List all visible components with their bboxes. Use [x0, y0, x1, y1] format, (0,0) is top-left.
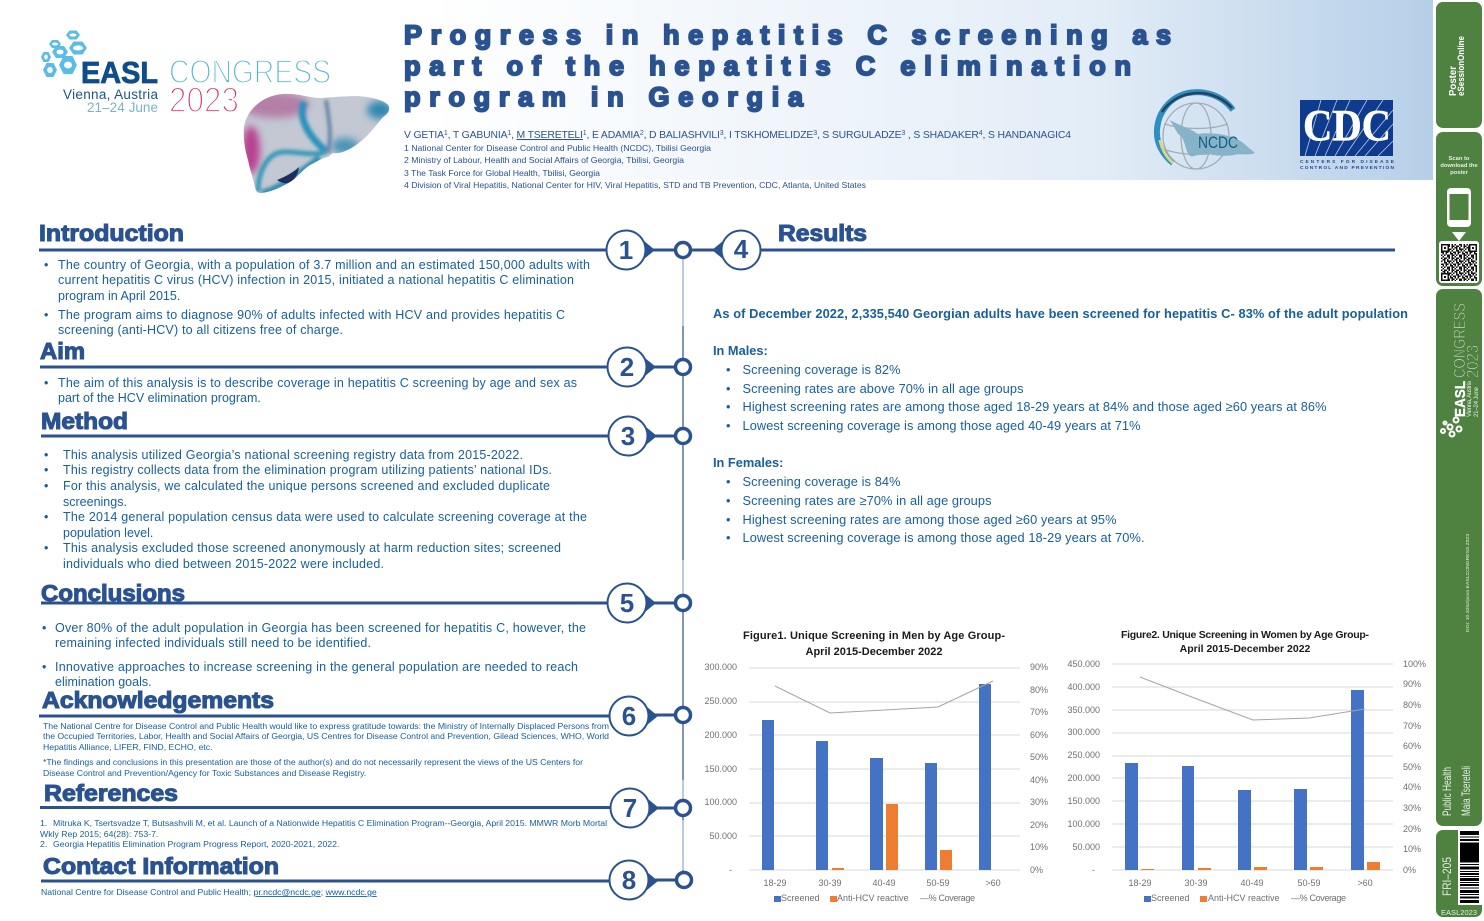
text block: •: [44, 510, 48, 524]
left axis: 350.000: [1067, 705, 1100, 715]
heading: Contact Information: [43, 853, 279, 879]
text: scan to download: [1440, 156, 1478, 176]
text block: •: [44, 448, 48, 462]
left axis: 100.000: [1067, 819, 1100, 829]
text block: The aim of this analysis is to describe coverage in hepatitis C screening by age and sex as: [58, 376, 577, 390]
text block: [44, 376, 577, 405]
right axis: 10%: [1403, 844, 1421, 854]
bars: screened: [762, 684, 991, 870]
text block: •: [44, 258, 48, 272]
authors: , S SHADAKER: [905, 130, 979, 141]
left axis: -: [729, 865, 732, 875]
marker 7: 7: [623, 793, 637, 823]
logo: EASL Congress 2023: [41, 30, 331, 120]
chart: figure 2 women: [1067, 629, 1426, 903]
left axis: 200.000: [1067, 773, 1100, 783]
right axis: 0%: [1030, 865, 1043, 875]
marker 7: [610, 788, 690, 828]
text block: •: [44, 376, 48, 390]
authors: 2: [640, 130, 644, 137]
affiliations: 1 National Center for Disease Control and Public Health (NCDC), Tbilisi Georgia: [404, 143, 711, 153]
text: scan to download: Scan to: [1449, 156, 1470, 162]
authors: 3: [901, 130, 905, 137]
category labels: [763, 878, 1001, 888]
text: FRI-205: FRI–205: [1440, 857, 1454, 896]
text: dates: 21–24 June: [87, 100, 158, 115]
legend: Anti-HCV reactive: [1208, 893, 1280, 903]
chart title: [743, 630, 1005, 658]
panel: conclusions: [41, 580, 690, 689]
category labels: 40-49: [872, 878, 896, 888]
right axis: [1403, 659, 1426, 875]
text: Vienna dates: 21–24 June: [1474, 386, 1480, 417]
left axis: 250.000: [704, 696, 737, 706]
text block: Innovative approaches to increase screening in the general population are needed to reach: [55, 660, 578, 674]
text block: This analysis utilized Georgia’s national screening registry data from 2015-2022.: [63, 448, 523, 462]
marker 6: [610, 696, 690, 736]
text block: Hepatitis Alliance, LIFER, FIND, ECHO, etc.: [43, 742, 212, 752]
left axis: 50.000: [709, 831, 737, 841]
text block: program in April 2015.: [58, 289, 180, 303]
females findings: In Females:: [713, 455, 783, 470]
marker 2: 2: [620, 352, 634, 382]
right axis: 20%: [1030, 820, 1048, 830]
left axis: 150.000: [704, 764, 737, 774]
heading: Introduction: [39, 220, 184, 246]
sidebar: QR download tab: [1436, 132, 1482, 286]
text block: For this analysis, we calculated the unique persons screened and excluded duplicate: [63, 479, 550, 493]
affiliations: [404, 143, 867, 190]
authors: M TSERETELI: [517, 130, 583, 141]
header banner: [0, 0, 1433, 180]
text block: Over 80% of the adult population in Georgia has been screened for hepatitis C, however, the: [55, 621, 586, 635]
marker 1: [606, 230, 690, 270]
heading: Aim: [40, 338, 85, 364]
text block: 1.: [40, 818, 47, 828]
category labels: 50-59: [926, 878, 950, 888]
marker 5: [608, 584, 690, 622]
sidebar: congress tab: [1436, 289, 1482, 826]
females findings: •: [726, 474, 730, 489]
text block: The program aims to diagnose 90% of adults infected with HCV and provides hepatitis C: [58, 308, 565, 322]
affiliations: 2 Ministry of Labour, Health and Social Affairs of Georgia, Tbilisi, Georgia: [404, 155, 684, 165]
panel: references: [40, 780, 690, 849]
marker 8: [610, 860, 692, 900]
legend: —% Coverage: [920, 893, 975, 903]
text block: screening (anti-HCV) to all citizens free of charge.: [58, 323, 343, 337]
text block: •: [42, 660, 46, 674]
males findings: •: [726, 418, 730, 433]
chart: figure 1 men: [704, 630, 1048, 903]
text: Vienna dates: Vienna, Austria: [1467, 380, 1473, 417]
marker 4: [690, 230, 760, 270]
females findings: Screening rates are ≥70% in all age groups: [742, 493, 992, 508]
right axis: 50%: [1030, 752, 1048, 762]
category labels: >60: [1357, 878, 1373, 888]
heading: Method: [41, 408, 128, 434]
right axis: 20%: [1403, 824, 1421, 834]
legend: Anti-HCV reactive: [837, 893, 909, 903]
marker 3: 3: [621, 421, 635, 451]
authors: , I TSKHOMELIDZE: [724, 130, 813, 141]
marker 8: 8: [622, 865, 636, 895]
text block: [40, 818, 607, 849]
panel: results: [690, 220, 1408, 545]
marker 2: [608, 348, 690, 386]
heading: Acknowledgements: [42, 687, 274, 713]
text: 2023: 2023: [169, 81, 239, 120]
panel: acknowledgements: [39, 687, 690, 778]
text block: National Centre for Disease Control and Public Health; pr.ncdc@ncdc.ge; www.ncdc.ge: [41, 887, 377, 897]
males findings: Highest screening rates are among those aged 18-29 years at 84% and those aged ≥60 years at 86%: [742, 399, 1326, 414]
sidebar: poster sessions tab: eSessionOnline: [1456, 36, 1466, 96]
logo: CDC: [1300, 100, 1395, 171]
text block: remaining infected individuals still need to be identified.: [55, 636, 371, 650]
text block: individuals who died between 2015-2022 were included.: [63, 557, 384, 571]
legend: Screened: [781, 893, 820, 903]
text: scan to download: download the: [1440, 163, 1478, 169]
panel: aim: [40, 338, 690, 405]
text block: current hepatitis C virus (HCV) infection in 2015, initiated a national hepatitis C elimination: [58, 273, 574, 287]
sidebar: poster number tab: [1436, 830, 1482, 917]
timeline spine: [682, 250, 684, 880]
left axis: 50.000: [1072, 842, 1100, 852]
text: EASL: EASL: [1452, 381, 1469, 417]
text block: the Occupied Territories, Labor, Health and Social Affairs of Georgia, US Centres for Disease Control and Prevention, Gilead Sciences, WHO, World: [43, 731, 609, 741]
right axis: 40%: [1030, 775, 1048, 785]
females findings: •: [726, 530, 730, 545]
QR code: [1439, 241, 1479, 283]
authors: 1: [507, 130, 511, 137]
heading: References: [44, 780, 178, 806]
icon: hexagons: [1441, 418, 1462, 436]
logo: NCDC: [1157, 92, 1255, 169]
title: program in Georgia: [404, 82, 804, 112]
category labels: 30-39: [1184, 878, 1208, 888]
category labels: 50-59: [1297, 878, 1321, 888]
chart title: April 2015-December 2022: [806, 646, 942, 658]
text block: part of the HCV elimination program.: [58, 391, 261, 405]
authors and affiliations: [404, 130, 1071, 190]
males findings: In Males:: [713, 343, 768, 358]
legend: Screened: [1151, 893, 1190, 903]
left axis: 400.000: [1067, 682, 1100, 692]
barcode: [1460, 831, 1479, 903]
text block: •: [44, 479, 48, 493]
text block: elimination goals.: [55, 675, 152, 689]
females findings: Highest screening rates are among those aged ≥60 years at 95%: [742, 512, 1116, 527]
right axis: 80%: [1403, 700, 1421, 710]
affiliations: 4 Division of Viral Hepatitis, National Center for HIV, Viral Hepatitis, STD and TB Prevention, CDC, Atlanta, United States: [404, 180, 867, 190]
text: scan to download: poster: [1450, 170, 1469, 176]
category labels: 30-39: [818, 878, 842, 888]
marker 4: 4: [734, 234, 749, 264]
panel: method: [41, 408, 690, 571]
line: coverage: [1140, 677, 1365, 720]
right axis: [1030, 662, 1048, 875]
text block: This analysis excluded those screened anonymously at harm reduction sites; screened: [63, 541, 561, 555]
males findings: [713, 343, 1326, 433]
right axis: 30%: [1030, 797, 1048, 807]
text: presenter: Maia Tsereteli: [1459, 766, 1473, 816]
authors: , D BALIASHVILI: [644, 130, 720, 141]
females findings: Screening coverage is 84%: [742, 474, 900, 489]
title: [404, 20, 1171, 112]
text: poster sessions online: Poster: [1448, 66, 1459, 96]
text: CDC caption: [1300, 159, 1395, 171]
text block: population level.: [63, 526, 153, 540]
text block: •: [44, 463, 48, 477]
text block: Wkly Rep 2015; 64(28): 753-7.: [40, 829, 158, 839]
text: EASL2023: EASL2023: [1441, 908, 1477, 917]
authors: V GETIA: [404, 130, 444, 141]
left axis: 300.000: [1067, 727, 1100, 737]
males findings: •: [726, 362, 730, 377]
right axis: 30%: [1403, 803, 1421, 813]
text: Vienna dates: [1467, 380, 1480, 417]
females findings: [713, 455, 1144, 545]
affiliations: 3 The Task Force for Global Health, Tbilisi, Georgia: [404, 168, 600, 178]
category labels: >60: [985, 878, 1001, 888]
males findings: Screening rates are above 70% in all age groups: [742, 381, 1024, 396]
authors: , T GABUNIA: [448, 130, 508, 141]
left axis: 150.000: [1067, 796, 1100, 806]
text block: [44, 448, 587, 571]
title: part of the hepatitis C elimination: [404, 51, 1131, 81]
category labels: 40-49: [1240, 878, 1264, 888]
icon: hexagon cluster: [41, 30, 87, 77]
left axis: 250.000: [1067, 750, 1100, 760]
left axis: [1067, 659, 1100, 875]
right axis: 70%: [1030, 707, 1048, 717]
bars: anti-HCV reactive: [832, 804, 952, 870]
text block: *The findings and conclusions in this presentation are those of the author(s) and do not necessarily represent the views of the US Centers for: [43, 757, 583, 767]
title: Progress in hepatitis C screening as: [404, 20, 1171, 50]
text block: [44, 258, 590, 337]
heading: Conclusions: [41, 580, 185, 606]
text block: 2.: [40, 839, 47, 849]
left axis: 450.000: [1067, 659, 1100, 669]
right axis: 60%: [1403, 741, 1421, 751]
text block: Georgia Hepatitis Elimination Program Progress Report, 2020-2021, 2022.: [53, 839, 339, 849]
left axis: 100.000: [704, 797, 737, 807]
females findings: •: [726, 493, 730, 508]
males findings: •: [726, 381, 730, 396]
key finding: As of December 2022, 2,335,540 Georgian adults have been screened for hepatitis C- 83% of the adult population: [713, 306, 1408, 321]
text block: The National Centre for Disease Control and Public Health would like to express gratitude towards: the Ministry of Internally Displaced Persons from: [43, 721, 609, 731]
legend: [1144, 893, 1346, 903]
text: EASL: EASL: [81, 55, 158, 90]
chart title: [1121, 629, 1370, 655]
marker 3: [608, 416, 690, 456]
text: CDC caption: CENTERS FOR DISEASE: [1300, 159, 1395, 165]
females findings: •: [726, 512, 730, 527]
text: NCDC: NCDC: [1198, 133, 1238, 152]
males findings: •: [726, 399, 730, 414]
right axis: 10%: [1030, 842, 1048, 852]
right axis: 80%: [1030, 685, 1048, 695]
text: Vienna, Austria: Vienna, Austria: [63, 87, 158, 102]
authors: 3: [720, 130, 724, 137]
authors: 1: [583, 130, 587, 137]
authors: 3: [813, 130, 817, 137]
text block: screenings.: [63, 495, 127, 509]
text block: •: [42, 621, 46, 635]
marker 5: 5: [620, 588, 634, 618]
right axis: 90%: [1403, 679, 1421, 689]
bars: screened: [1125, 690, 1364, 870]
females findings: Lowest screening coverage is among those aged 18-29 years at 70%.: [742, 530, 1144, 545]
chart title: Figure1. Unique Screening in Men by Age Group-: [743, 630, 1005, 642]
text: CONGRESS: CONGRESS: [169, 53, 331, 90]
text: topic: Public Health: [1440, 767, 1454, 816]
right axis: 60%: [1030, 730, 1048, 740]
text block: •: [44, 541, 48, 555]
authors: ,: [511, 130, 517, 141]
text block: This registry collects data from the elimination program utilizing patients’ national IDs.: [63, 463, 552, 477]
text block: Mitruka K, Tsertsvadze T, Butsashvili M, et al. Launch of a Nationwide Hepatitis C Elimination Program--Georgia, April 2015. MMWR Morb Mortal: [53, 818, 607, 828]
category labels: 18-29: [1128, 878, 1152, 888]
right axis: 90%: [1030, 662, 1048, 672]
left axis: -: [1092, 865, 1095, 875]
chart title: April 2015-December 2022: [1180, 643, 1311, 655]
legend: —% Coverage: [1291, 893, 1346, 903]
marker 1: 1: [619, 235, 633, 265]
text block: The 2014 general population census data were used to calculate screening coverage at the: [63, 510, 587, 524]
males findings: Lowest screening coverage is among those aged 40-49 years at 71%: [742, 418, 1140, 433]
right axis: 40%: [1403, 782, 1421, 792]
text block: [42, 621, 586, 689]
authors: , E ADAMIA: [587, 130, 640, 141]
chart title: Figure2. Unique Screening in Women by Age Group-: [1121, 629, 1370, 641]
legend: [774, 893, 975, 903]
line: coverage: [775, 681, 993, 713]
illustration: liver: [244, 94, 390, 193]
text block: The country of Georgia, with a population of 3.7 million and an estimated 150,000 adults with: [58, 258, 590, 272]
males findings: Screening coverage is 82%: [742, 362, 900, 377]
left axis: 300.000: [704, 662, 737, 672]
icon: phone: [1447, 188, 1471, 241]
right axis: 0%: [1403, 865, 1416, 875]
text: CONGRESS: CONGRESS: [1450, 303, 1469, 378]
right axis: 50%: [1403, 762, 1421, 772]
category labels: [1128, 878, 1373, 888]
authors: 4: [979, 130, 983, 137]
right axis: 70%: [1403, 721, 1421, 731]
heading: Results: [778, 220, 867, 246]
left axis: [704, 662, 737, 875]
panel: introduction: [39, 220, 690, 337]
category labels: 18-29: [763, 878, 787, 888]
left axis: 200.000: [704, 730, 737, 740]
text: CDC caption: CONTROL AND PREVENTION: [1300, 165, 1395, 171]
authors: 1: [444, 130, 448, 137]
bars: anti-HCV reactive: [1141, 862, 1380, 870]
text block: Disease Control and Prevention/Agency for Toxic Substances and Disease Registry.: [43, 768, 366, 778]
text: CDC letters: CDC: [1303, 101, 1391, 150]
marker 6: 6: [622, 701, 636, 731]
text block: [43, 721, 609, 778]
panel: contact information: [41, 853, 692, 900]
authors: , S HANDANAGIC4: [983, 130, 1071, 141]
text: 2023: 2023: [1463, 345, 1482, 378]
text: DOI: DOI: 10.3252/pcon.EASLCONGRESS.2023: [1465, 534, 1471, 632]
authors: , S SURGULADZE: [817, 130, 902, 141]
text block: •: [44, 308, 48, 322]
sidebar: poster sessions tab: [1436, 2, 1482, 128]
right axis: 100%: [1403, 659, 1426, 669]
